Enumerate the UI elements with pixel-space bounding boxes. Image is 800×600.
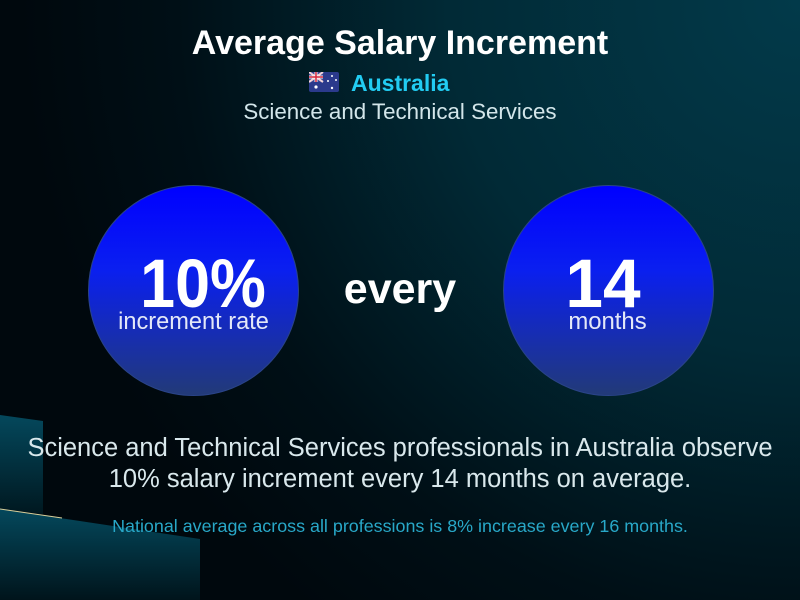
connector word: every (344, 265, 456, 313)
title: Average Salary Increment (192, 24, 608, 62)
panel: increment rate circle (88, 185, 299, 396)
subtitle: Science and Technical Services (243, 99, 557, 124)
increment rate label: increment rate (118, 309, 269, 335)
summary text: 10% salary increment every 14 months on average. (109, 465, 691, 493)
months label: months (568, 308, 647, 335)
icon: Australian flag (309, 72, 339, 92)
country label: Australia (351, 70, 449, 96)
increment value: 10% (140, 245, 266, 322)
months value: 14 (565, 245, 641, 322)
summary text: Science and Technical Services professionals in Australia observe (27, 434, 773, 462)
summary text (27, 434, 773, 493)
national average note: National average across all professions is 8% increase every 16 months. (112, 516, 688, 536)
panel: months circle (503, 185, 714, 396)
